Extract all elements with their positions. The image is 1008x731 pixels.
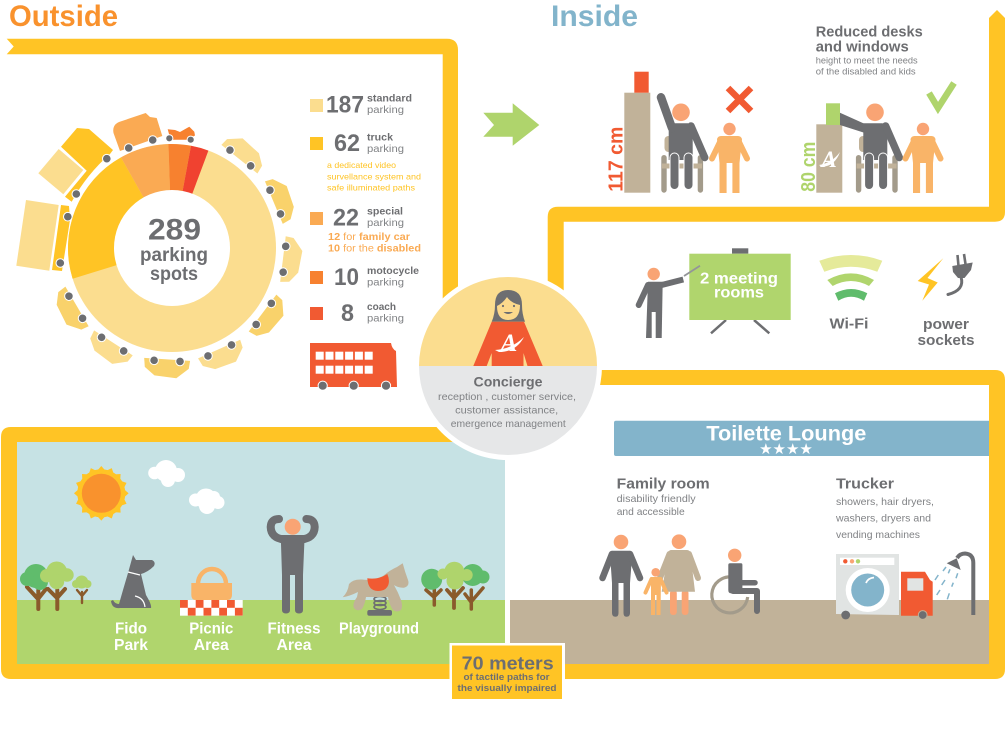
label: power sockets bbox=[918, 316, 974, 349]
panel: park scene bbox=[17, 442, 505, 664]
icon: plug bbox=[948, 254, 973, 294]
label: power sockets: power bbox=[923, 316, 969, 333]
label: 80 cm: 80 cm bbox=[798, 142, 820, 192]
legend row: 22 special: 22 bbox=[333, 205, 359, 232]
car: bottom right bbox=[197, 337, 248, 376]
note: family car and disabled bbox=[328, 232, 421, 254]
icon: Wi-Fi bbox=[819, 255, 882, 301]
note: video surveillance: survellance system and bbox=[327, 171, 421, 181]
wheelchair user bbox=[712, 549, 757, 613]
legend row: 62 truck: 62 bbox=[334, 130, 360, 157]
icon: lightning bolt bbox=[918, 258, 943, 301]
text: concierge services: reception , customer service, bbox=[438, 391, 576, 403]
car: left bbox=[49, 285, 91, 336]
icon: family figures bbox=[602, 534, 757, 617]
motorcycle bbox=[166, 127, 195, 143]
panel: concierge bbox=[414, 272, 602, 460]
text: reduced desks heading: Reduced desks bbox=[816, 24, 923, 41]
label: Picnic Area: Area bbox=[194, 637, 229, 654]
callout: 70 meters of tactile paths: 70 meters bbox=[462, 653, 554, 673]
donut segment: standard 187 bbox=[68, 144, 276, 352]
text: trucker bbox=[835, 476, 934, 541]
logo on desk: A bbox=[819, 147, 837, 172]
banner: Toilette Lounge: Toilette Lounge bbox=[706, 423, 866, 446]
legend row: 22 special bbox=[310, 205, 404, 232]
car: top right bbox=[219, 131, 269, 175]
text: family room bbox=[617, 476, 710, 518]
legend row: 10 motorcycle: motocycle bbox=[367, 265, 419, 277]
circle bottom bbox=[419, 366, 597, 455]
label: Playground: Playground bbox=[339, 620, 419, 637]
text: reduced desks heading bbox=[816, 24, 923, 55]
label: 2 meeting rooms bbox=[700, 270, 778, 302]
man bbox=[602, 535, 640, 617]
icon: washing machine bbox=[836, 554, 899, 619]
text: trucker: showers, hair dryers, bbox=[836, 496, 934, 508]
heading: Outside: Outside bbox=[9, 0, 118, 33]
legend row: 8 coach: coach bbox=[367, 301, 396, 313]
legend row: 10 motorcycle bbox=[310, 264, 419, 291]
legend row: 187 standard: parking bbox=[367, 104, 404, 116]
label: Concierge: Concierge bbox=[474, 374, 543, 390]
green board bbox=[689, 254, 791, 320]
icon: cloud 1 bbox=[148, 460, 185, 487]
label: 2 meeting rooms: 2 meeting bbox=[700, 270, 778, 287]
sky bbox=[17, 442, 505, 600]
legend row: 62 truck bbox=[310, 130, 404, 157]
trees: left group bbox=[20, 562, 92, 609]
red block on desk bbox=[634, 72, 649, 93]
legend row: 10 motorcycle: 10 bbox=[334, 264, 359, 291]
label: Wi-Fi: Wi-Fi bbox=[830, 315, 868, 332]
green block on desk bbox=[826, 103, 840, 125]
callout: 70 meters of tactile paths: of tactile paths for bbox=[464, 672, 550, 683]
legend row: 22 special: special bbox=[367, 206, 403, 218]
banner: Toilette Lounge: ★★★★ bbox=[759, 440, 813, 458]
donut total: 289: 289 bbox=[148, 213, 201, 246]
label: Fitness Area bbox=[268, 620, 320, 654]
note: video surveillance: safe illuminated paths bbox=[327, 183, 415, 193]
grass bbox=[17, 600, 505, 664]
legend row: 10 motorcycle: parking bbox=[367, 276, 404, 288]
text: family room: Family room bbox=[617, 476, 710, 493]
board tray bbox=[732, 248, 748, 254]
panel: toilette lounge floor bbox=[510, 600, 989, 664]
presenter figure bbox=[639, 266, 700, 339]
car: bottom bbox=[143, 356, 190, 379]
donut label: spots: spots bbox=[150, 264, 198, 285]
donut segment: special 22 bbox=[121, 144, 172, 248]
wheelchair user reaching bbox=[661, 97, 705, 193]
legend row: 8 coach bbox=[310, 300, 404, 327]
label: Fido Park bbox=[114, 620, 148, 654]
donut segment: truck 62 bbox=[68, 157, 172, 279]
text: family room: and accessible bbox=[617, 506, 685, 518]
text: reduced desks heading: and windows bbox=[816, 38, 909, 55]
circle top bbox=[419, 277, 597, 366]
car: right bbox=[278, 236, 304, 284]
icon: green check bbox=[929, 83, 954, 108]
callout: 70 meters of tactile paths bbox=[450, 643, 565, 701]
icon: picnic basket bbox=[180, 569, 243, 616]
child figure bbox=[906, 123, 940, 194]
child bbox=[646, 568, 666, 615]
donut segment: motorcycle 10 bbox=[168, 144, 191, 248]
truck: left bbox=[16, 200, 72, 271]
label: Fitness Area: Area bbox=[276, 637, 312, 654]
label: power sockets: sockets bbox=[918, 332, 974, 349]
label: 2 meeting rooms: rooms bbox=[714, 285, 764, 302]
text: trucker: Trucker bbox=[836, 476, 894, 493]
text: reduced desks note bbox=[816, 55, 918, 78]
text: reduced desks note: height to meet the needs bbox=[816, 55, 918, 66]
label: Picnic Area: Picnic bbox=[189, 620, 234, 637]
banner: Toilette Lounge bbox=[614, 421, 989, 458]
chart: parking donut bbox=[68, 144, 276, 352]
panel: meeting rooms bbox=[639, 248, 791, 339]
trees: right group bbox=[421, 562, 490, 609]
donut label: parking: parking bbox=[140, 245, 208, 266]
text: trucker: vending machines bbox=[836, 529, 920, 541]
desk 117 cm bbox=[624, 93, 650, 193]
icon: exercising figure bbox=[271, 519, 315, 614]
heading: Inside: Inside bbox=[551, 0, 638, 33]
child figure bbox=[712, 123, 747, 194]
frame: inside upper ribbon bbox=[548, 10, 1005, 300]
donut hole bbox=[114, 190, 230, 306]
board legs bbox=[711, 320, 769, 333]
legend row: 187 standard: 187 bbox=[326, 92, 364, 119]
white ring bbox=[414, 272, 602, 460]
text: concierge services: emergence management bbox=[451, 418, 566, 430]
legend row: 8 coach: 8 bbox=[341, 300, 354, 327]
label: Picnic Area bbox=[189, 620, 234, 654]
text: concierge services: customer assistance, bbox=[455, 405, 558, 417]
note: video surveillance: a dedicated video bbox=[327, 160, 396, 170]
text: trucker: washers, dryers and bbox=[835, 513, 931, 525]
text: family room: disability friendly bbox=[617, 493, 696, 505]
label: Fitness Area: Fitness bbox=[268, 620, 320, 637]
legend row: 187 standard bbox=[310, 92, 412, 119]
note: family car and disabled: 10 for the disabled bbox=[328, 243, 421, 254]
icons: parked vehicles around the donut bbox=[16, 113, 304, 379]
icon: red cross bbox=[728, 88, 751, 111]
woman bbox=[660, 534, 698, 615]
legend row: 22 special: parking bbox=[367, 217, 404, 229]
icon: shower bbox=[935, 554, 973, 615]
panel: standard high desk bbox=[606, 72, 751, 194]
icon: cloud 2 bbox=[189, 488, 224, 514]
label: Fido Park: Park bbox=[114, 637, 148, 654]
note: video surveillance bbox=[327, 160, 421, 193]
icon: double decker bus bbox=[310, 343, 397, 390]
callout: 70 meters of tactile paths: the visually impaired bbox=[458, 683, 557, 694]
desk 80 cm bbox=[816, 124, 842, 193]
legend row: 187 standard: standard bbox=[367, 93, 412, 105]
van: special parking bbox=[113, 113, 162, 152]
icon: spring rocking horse bbox=[343, 563, 408, 616]
car: bottom left bbox=[84, 328, 134, 371]
legend: parking breakdown bbox=[310, 92, 421, 327]
note: family car and disabled: 12 for family car bbox=[328, 232, 410, 243]
truck: upper left bbox=[38, 128, 113, 202]
panel: reduced desk bbox=[798, 83, 954, 194]
frame: outside ribbon bbox=[7, 39, 458, 320]
arrow: outside to inside bbox=[483, 103, 539, 146]
legend row: 8 coach: parking bbox=[367, 312, 404, 324]
icon: dog bbox=[111, 555, 155, 608]
wheelchair user at desk bbox=[840, 104, 899, 193]
car: upper right bbox=[262, 174, 300, 225]
label: Fido Park: Fido bbox=[115, 620, 147, 637]
icon: vending truck bbox=[901, 572, 933, 619]
text: concierge services bbox=[438, 391, 576, 430]
donut segment: coach 8 bbox=[172, 146, 208, 248]
text: reduced desks note: of the disabled and kids bbox=[816, 67, 916, 78]
concierge figure bbox=[473, 290, 543, 366]
car: lower right bbox=[247, 293, 291, 343]
legend row: 62 truck: parking bbox=[367, 143, 404, 155]
icon: sun bbox=[74, 466, 129, 521]
label: 117 cm: 117 cm bbox=[606, 127, 628, 192]
frame: lower ribbon bbox=[1, 370, 1005, 679]
legend row: 62 truck: truck bbox=[367, 132, 393, 144]
concierge figure: A bbox=[499, 330, 517, 357]
